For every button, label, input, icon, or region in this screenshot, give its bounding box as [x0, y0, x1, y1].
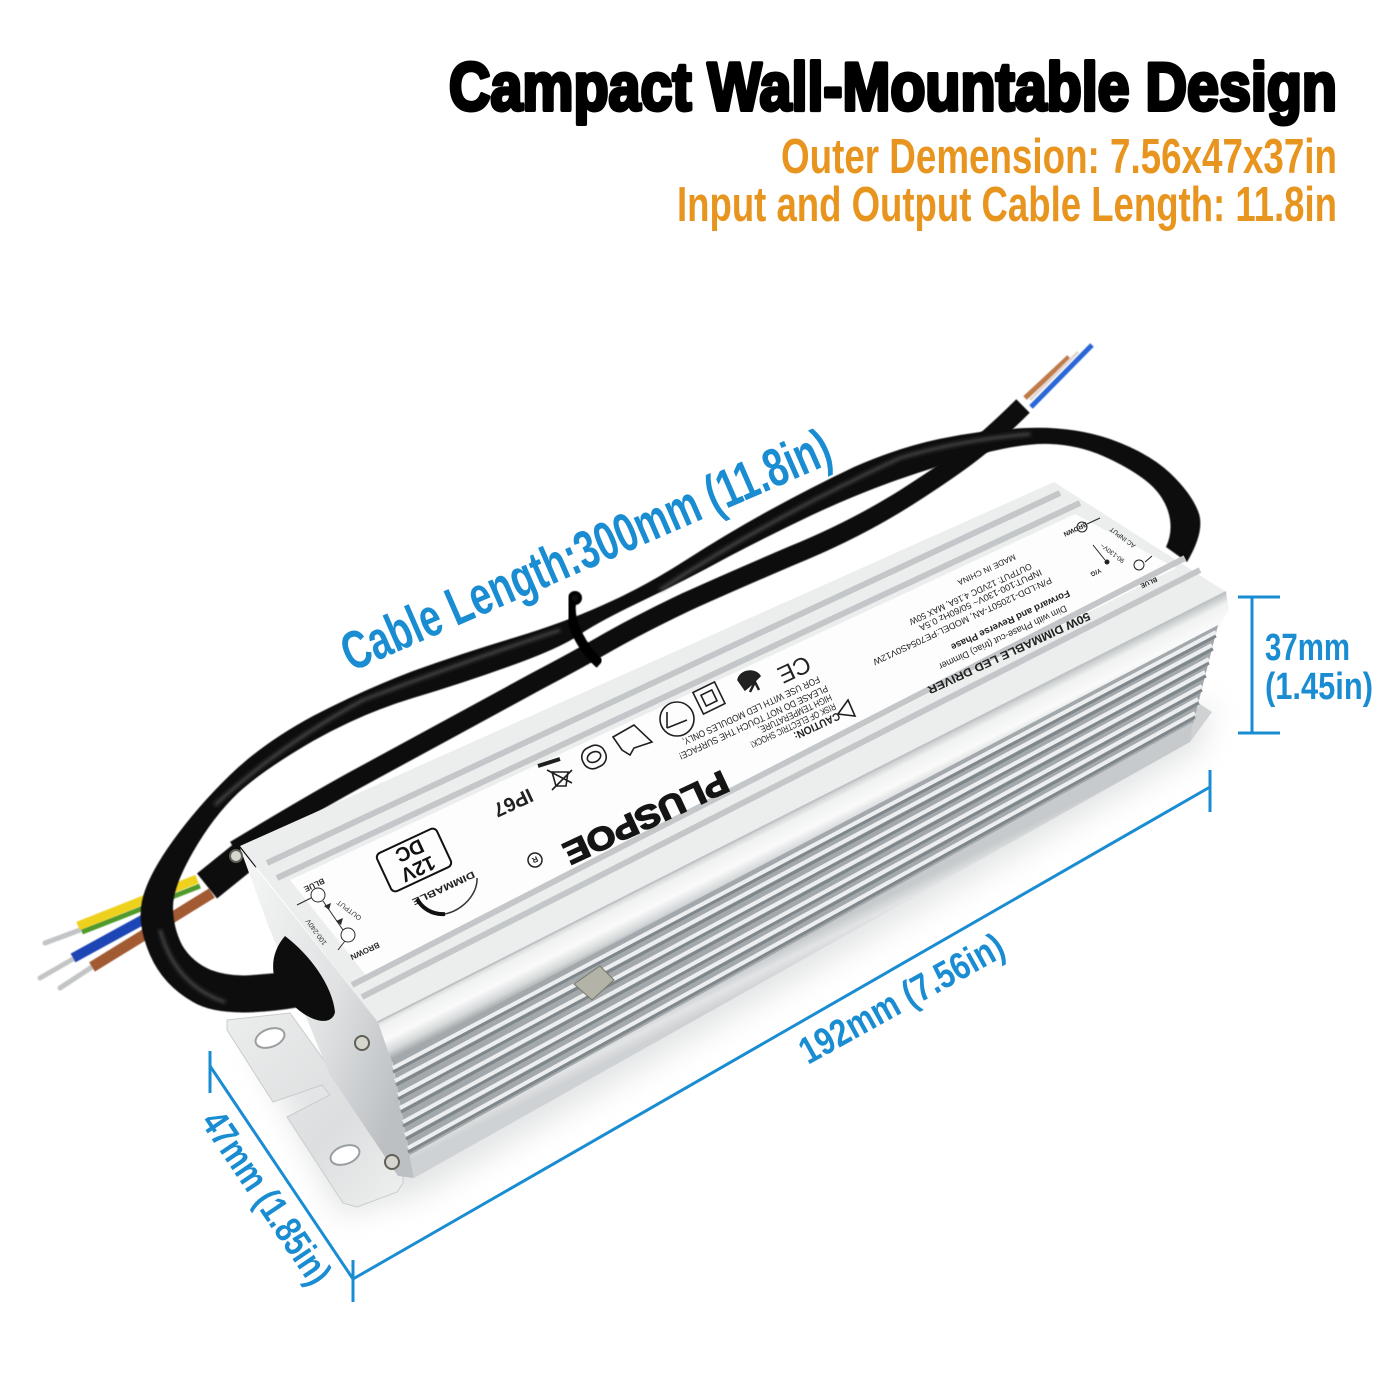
dimension: width text: 47mm (1.85in)	[193, 1104, 339, 1293]
label: 12V DC box	[375, 826, 453, 893]
wire: blue	[73, 905, 170, 958]
dimension: height text	[1265, 627, 1373, 708]
wire terminals	[40, 930, 92, 988]
label: IP67: IP67	[490, 783, 536, 821]
label: specifications text: 50W DIMMABLE LED DRIVER	[925, 609, 1092, 696]
label: end wiring diagram	[297, 876, 381, 962]
mounting bracket	[227, 704, 1212, 1207]
label: 12V DC box: 12V	[396, 851, 439, 886]
dimension: height bracket	[1238, 597, 1280, 733]
wire: yellow-green	[82, 886, 200, 932]
grooves	[267, 493, 1200, 997]
dimension: length text: 192mm (7.56in)	[792, 926, 1012, 1073]
label: specifications text: INPUT:100-130V~ 50/60Hz 0.5A	[918, 567, 1043, 633]
tail cable	[207, 406, 1023, 886]
label: certification icons	[538, 650, 855, 790]
label: brand: PLUSPOE	[558, 764, 734, 872]
dimension: height text: (1.45in)	[1265, 666, 1373, 708]
label: specifications text	[871, 552, 1092, 696]
label: registered mark	[528, 853, 542, 867]
side fins	[393, 632, 1216, 1148]
label: end wiring diagram: BLUE	[302, 876, 326, 894]
dimension: cable length text: Cable Length:300mm (11.8in)	[332, 417, 840, 683]
top face	[240, 482, 1226, 1022]
side band	[378, 592, 1229, 1062]
label: AC input diagram: 90-130V~	[1099, 541, 1126, 564]
label: registered mark: R	[530, 854, 539, 865]
label: caution text: HIGH TEMPERATURE,	[756, 691, 833, 735]
label: AC input diagram: AC INPUT	[1109, 525, 1137, 549]
label: 12V DC box: DC	[392, 834, 427, 866]
cable tie	[570, 593, 600, 664]
rubber grommet	[273, 936, 335, 1021]
label: specifications text: OUTPUT: 12VDC 4.16A, MAX 50W	[907, 561, 1033, 627]
label: certification icons: CE	[773, 650, 815, 688]
dimension: length line	[353, 770, 1210, 1279]
wire: brown	[92, 893, 212, 967]
side screw	[574, 966, 614, 1000]
label: end wiring diagram: OUTPUT	[335, 898, 363, 921]
label: end wiring diagram: BROWN	[349, 940, 381, 962]
end face	[240, 848, 414, 1178]
label: AC input diagram: BLUE	[1139, 575, 1158, 589]
fin shadows	[393, 636, 1216, 1152]
cable highlights	[160, 434, 1030, 1002]
label: caution text: FOR USE WITH LED MODULES ONLY,	[681, 673, 821, 747]
label: dimmable mark	[410, 868, 477, 914]
dimension: width line	[210, 1051, 353, 1302]
looped cable	[141, 428, 1200, 1012]
fin recess	[392, 625, 1218, 1156]
label: caution text: RISK OF ELECTRIC SHOCK!	[748, 700, 837, 750]
wire ends: top	[1025, 345, 1092, 407]
label: AC input diagram: Y/G	[1089, 566, 1102, 577]
wire ends: left	[40, 879, 212, 988]
label: end wiring diagram: 100-240V	[305, 917, 329, 946]
label: dimmable mark: DIMMABLE	[410, 868, 476, 907]
label: specifications text: Dim with Phase-cut (triac) Dimmer	[937, 602, 1068, 671]
label: specifications text: Forward and Reverse Phase	[949, 587, 1071, 652]
product shadow	[250, 700, 1215, 1215]
bottom flange	[410, 722, 1193, 1178]
label: specifications text: MADE IN CHINA	[955, 552, 1017, 587]
top face edge	[378, 592, 1226, 1022]
label: specifications text: P/N:LDD-12050T-AN, MODEL:PE7054S0V12W	[871, 575, 1053, 667]
white label	[290, 514, 1176, 978]
label: AC input diagram	[1062, 518, 1158, 589]
dimension: height text: 37mm	[1265, 627, 1350, 669]
label: AC input diagram: BROWN	[1062, 520, 1088, 537]
bolt heads	[230, 850, 399, 1169]
label: caution text: CAUTION:	[791, 709, 842, 741]
label: caution text: PLEASE DO NOT TOUCH THE SURFACE!	[677, 682, 829, 761]
driver body	[230, 482, 1229, 1178]
